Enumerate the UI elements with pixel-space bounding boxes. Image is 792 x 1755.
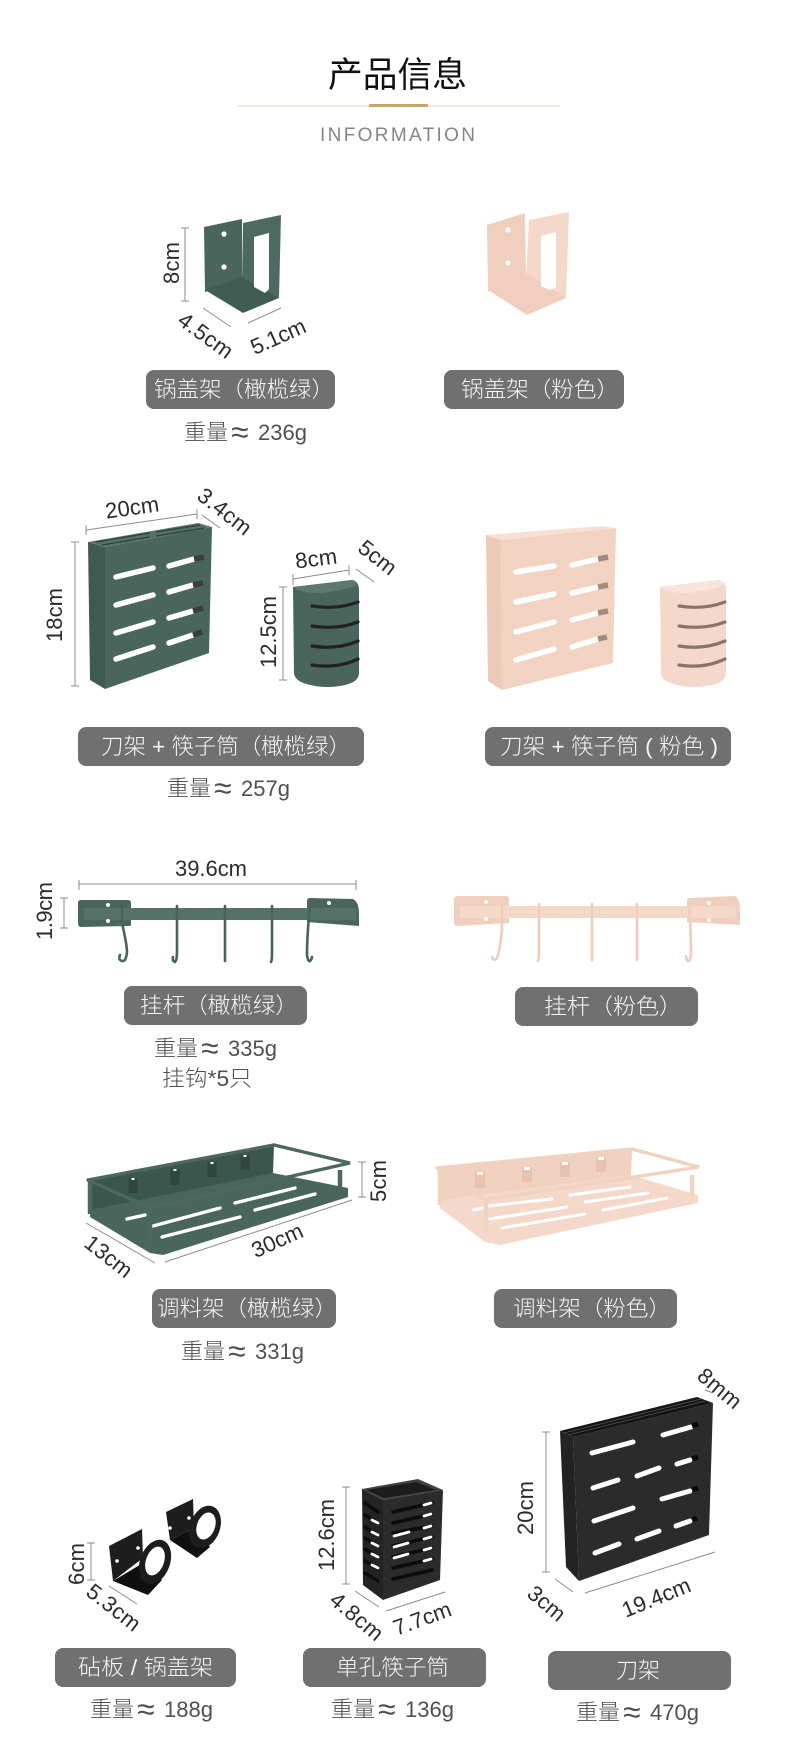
dimension labels: knife rack and chopstick holder: 5cm xyxy=(353,535,402,580)
dimension labels: knife rack and chopstick holder: 12.5cm xyxy=(256,596,281,668)
weight: brackets: ≈ xyxy=(137,1691,155,1727)
weight: brackets: 188g xyxy=(164,1697,213,1722)
product: spice rack, olive green xyxy=(86,1145,366,1263)
product: knife rack and chopstick holder, olive green xyxy=(71,509,374,689)
label: chopstick holder xyxy=(303,1648,486,1687)
title: 产品信息 xyxy=(328,47,467,98)
label: knife rack olive: 刀架 + 筷子筒（橄榄绿） xyxy=(101,734,351,759)
dimension labels: knife rack black: 3cm xyxy=(523,1580,571,1626)
dimension labels: hanging rail: 39.6cm xyxy=(175,856,247,881)
product: spice rack, pink xyxy=(437,1149,699,1245)
dimension labels: knife rack and chopstick holder: 18cm xyxy=(42,588,67,642)
dimension labels: hanging rail xyxy=(32,856,247,940)
label: hanging rail olive xyxy=(124,986,307,1025)
dimension labels: brackets: 5.3cm xyxy=(82,1578,146,1636)
label: spice rack olive xyxy=(152,1289,337,1328)
weight: hanging rail and hooks: 335g xyxy=(228,1036,277,1061)
dimension labels: pot lid rack: 4.5cm xyxy=(173,307,238,364)
dimension labels: knife rack and chopstick holder: 8cm xyxy=(294,544,338,573)
dimension labels: knife rack black xyxy=(513,1363,747,1626)
label: brackets xyxy=(55,1648,236,1687)
weight: knife rack: ≈ xyxy=(214,770,232,806)
weight: brackets: 重量 xyxy=(90,1697,134,1722)
dimension labels: chopstick holder: 4.8cm xyxy=(325,1587,388,1646)
product: knife rack and chopstick holder, pink xyxy=(486,526,726,690)
weight: knife rack xyxy=(167,770,290,806)
label: hanging rail pink: 挂杆（粉色） xyxy=(544,994,682,1019)
label: knife rack olive xyxy=(78,727,364,766)
weight: spice rack: ≈ xyxy=(228,1333,246,1369)
label: knife rack pink: 刀架 + 筷子筒 ( 粉色 ) xyxy=(500,734,718,759)
weight: hanging rail and hooks xyxy=(154,1030,277,1091)
label: spice rack pink: 调料架（粉色） xyxy=(513,1296,671,1321)
weight: knife rack: 257g xyxy=(241,776,290,801)
label: pot lid rack olive xyxy=(146,370,335,409)
dimension labels: chopstick holder xyxy=(314,1499,455,1646)
weight: pot lid rack: 重量 xyxy=(184,420,228,445)
dimension labels: pot lid rack: 8cm xyxy=(159,242,184,284)
weight: hanging rail and hooks: 重量 xyxy=(154,1036,198,1061)
weight: chopstick holder xyxy=(331,1691,454,1727)
weight: spice rack: 重量 xyxy=(181,1339,225,1364)
dimension labels: chopstick holder: 12.6cm xyxy=(314,1499,339,1571)
weight: pot lid rack: ≈ xyxy=(231,414,249,450)
dimension labels: pot lid rack xyxy=(159,242,310,364)
weight: knife rack: 重量 xyxy=(167,776,211,801)
dimension labels: knife rack black: 20cm xyxy=(513,1481,538,1535)
label: chopstick holder: 单孔筷子筒 xyxy=(336,1655,449,1680)
dimension labels: chopstick holder: 7.7cm xyxy=(390,1596,455,1640)
dimension labels: knife rack black: 19.4cm xyxy=(618,1572,694,1623)
label: brackets: 砧板 / 锅盖架 xyxy=(78,1655,213,1680)
weight: spice rack: 331g xyxy=(255,1339,304,1364)
label: knife rack black xyxy=(548,1651,731,1690)
weight: pot lid rack xyxy=(184,414,307,450)
dimension labels: knife rack and chopstick holder xyxy=(42,482,402,668)
weight: hanging rail and hooks: ≈ xyxy=(201,1030,219,1066)
weight: spice rack xyxy=(181,1333,304,1369)
title: INFORMATION xyxy=(320,125,475,146)
weight: chopstick holder: 136g xyxy=(405,1697,454,1722)
dimension labels: brackets xyxy=(64,1543,146,1636)
product: hanging rail, pink xyxy=(454,896,740,961)
label: spice rack pink xyxy=(494,1289,677,1328)
label: knife rack pink xyxy=(485,727,731,766)
product: black single chopstick holder xyxy=(342,1479,445,1611)
product: black cutting board and lid brackets xyxy=(87,1499,227,1604)
label: pot lid rack olive: 锅盖架（橄榄绿） xyxy=(154,377,334,402)
title xyxy=(238,47,560,146)
weight: knife rack black: 重量 xyxy=(576,1700,620,1725)
dimension labels: brackets: 6cm xyxy=(64,1543,89,1585)
dimension labels: knife rack and chopstick holder: 3.4cm xyxy=(193,482,257,540)
weight: knife rack black xyxy=(576,1694,699,1730)
dimension labels: knife rack and chopstick holder: 20cm xyxy=(104,491,161,524)
dimension labels: spice rack: 13cm xyxy=(80,1230,138,1283)
label: hanging rail olive: 挂杆（橄榄绿） xyxy=(140,993,298,1018)
product: pot lid rack, pink xyxy=(487,212,569,315)
weight: hanging rail and hooks: 挂钩*5只 xyxy=(162,1066,252,1091)
dimension labels: spice rack xyxy=(80,1160,391,1283)
label: hanging rail pink xyxy=(515,987,698,1026)
dimension labels: knife rack black: 8mm xyxy=(692,1363,747,1414)
dimension labels: spice rack: 30cm xyxy=(247,1218,307,1263)
product: pot lid rack, olive green xyxy=(181,215,281,327)
dimension labels: hanging rail: 1.9cm xyxy=(32,882,57,940)
weight: chopstick holder: ≈ xyxy=(378,1691,396,1727)
product: black knife rack xyxy=(542,1390,715,1593)
dimension labels: pot lid rack: 5.1cm xyxy=(247,313,310,360)
label: pot lid rack pink: 锅盖架（粉色） xyxy=(461,377,619,402)
label: spice rack olive: 调料架（橄榄绿） xyxy=(157,1296,337,1321)
weight: pot lid rack: 236g xyxy=(258,420,307,445)
weight: knife rack black: ≈ xyxy=(623,1694,641,1730)
label: knife rack black: 刀架 xyxy=(616,1658,660,1683)
label: pot lid rack pink xyxy=(444,370,624,409)
weight: knife rack black: 470g xyxy=(650,1700,699,1725)
weight: chopstick holder: 重量 xyxy=(331,1697,375,1722)
dimension labels: spice rack: 5cm xyxy=(366,1160,391,1202)
product: hanging rail, olive green xyxy=(60,880,359,962)
weight: brackets xyxy=(90,1691,213,1727)
